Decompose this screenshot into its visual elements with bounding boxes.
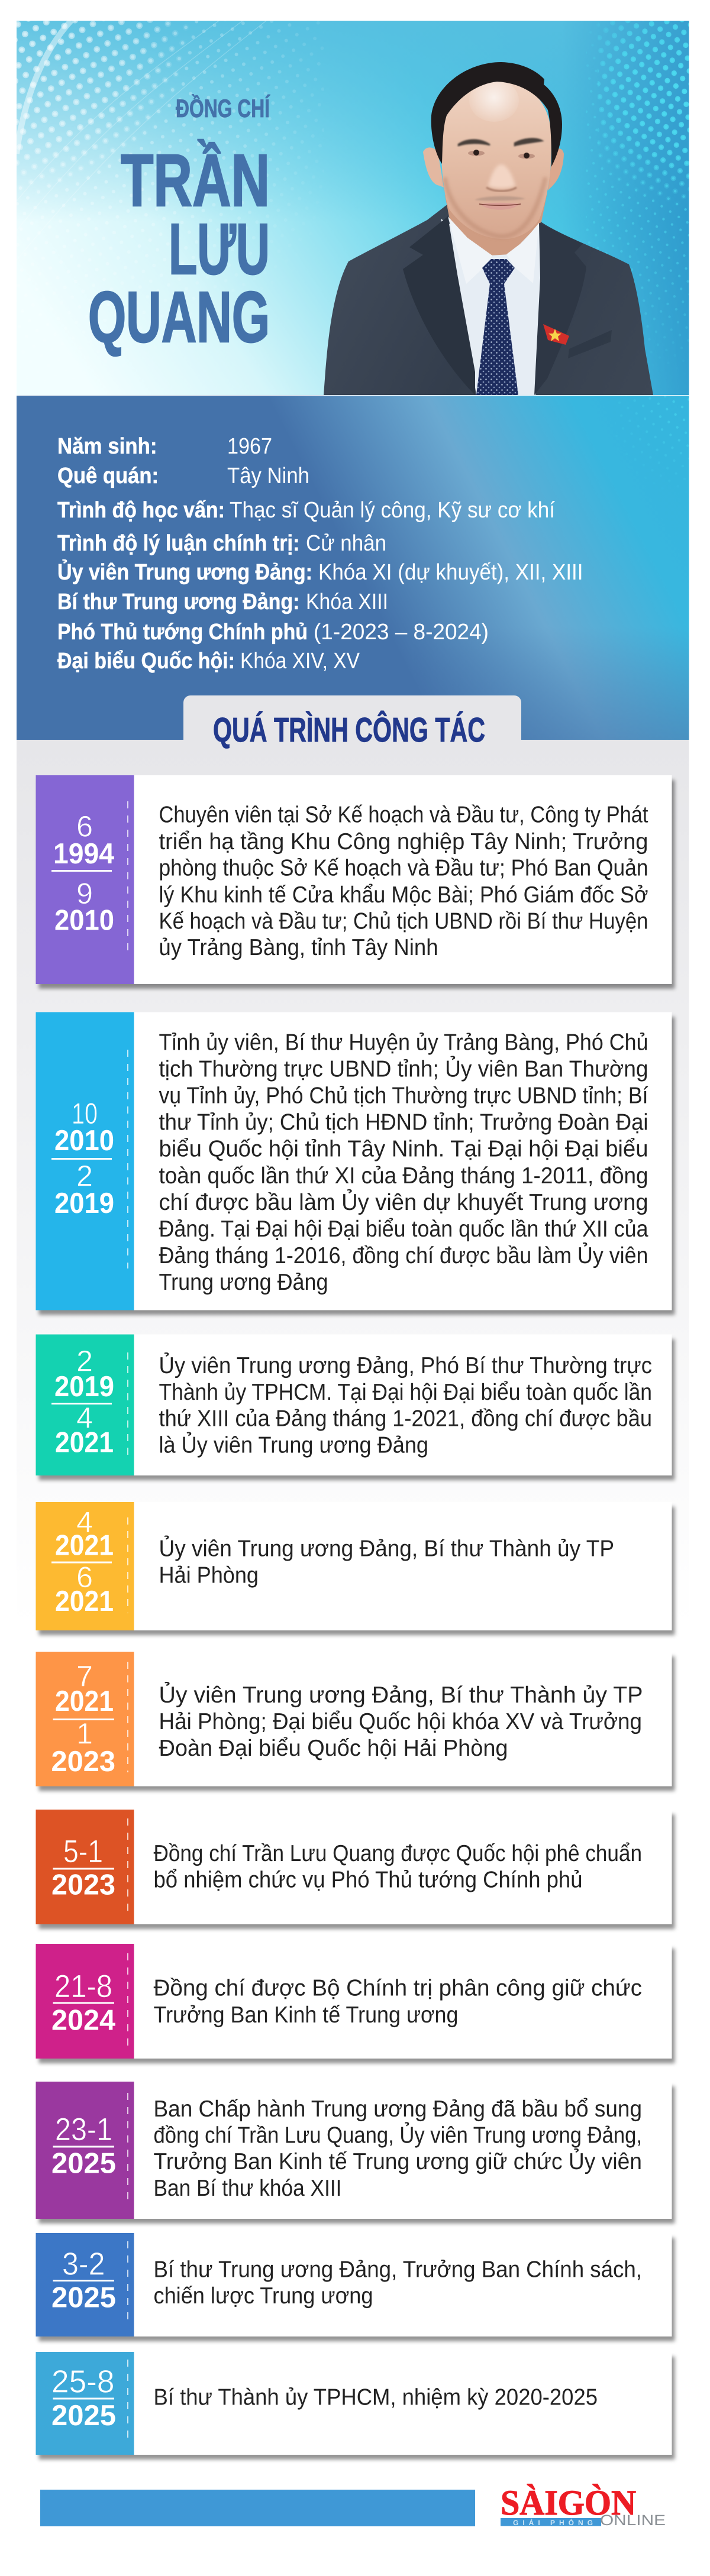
education: Trình độ học vấn: xyxy=(57,498,225,523)
description: là Ủy viên Trung ương Đảng xyxy=(159,1432,428,1458)
political theory level: Cử nhân xyxy=(306,531,386,556)
date badge: 2 xyxy=(76,1345,93,1378)
date badge: 2023 xyxy=(51,1746,115,1778)
description: Hải Phòng; Đại biểu Quốc hội khóa XV và Trưởng xyxy=(159,1709,642,1734)
description xyxy=(154,2096,642,2201)
name: Quang: QUANG xyxy=(88,277,270,357)
date badge xyxy=(36,2352,134,2455)
icon: national assembly flag pin xyxy=(543,324,569,345)
date badge: 2021 xyxy=(55,1685,114,1717)
date badge: 2023 xyxy=(51,1869,115,1901)
description: Chuyên viên tại Sở Kế hoạch và Đầu tư, Công ty Phát xyxy=(159,802,648,828)
date badge: 1 xyxy=(76,1717,93,1750)
description xyxy=(159,802,648,960)
description: đồng chí Trần Lưu Quang, Ủy viên Trung ương Đảng, xyxy=(154,2122,642,2148)
description: Đảng tháng 1-2016, đồng chí được bầu làm Ủy viên xyxy=(159,1242,648,1268)
label: Đồng chí: ĐỒNG CHÍ xyxy=(176,94,270,123)
deputy prime minister: Phó Thủ tướng Chính phủ xyxy=(57,620,308,645)
logo: Sài Gòn Giải Phóng Online: ONLINE xyxy=(600,2512,666,2529)
date badge: 25-8 xyxy=(51,2364,115,2400)
deputy prime minister xyxy=(57,620,489,645)
portrait: man in dark suit xyxy=(324,62,653,395)
description: Ủy viên Trung ương Đảng, Bí thư Thành ủy TP xyxy=(159,1682,643,1708)
date badge: 1994 xyxy=(53,838,114,870)
description: Thành ủy TPHCM. Tại Đại hội Đại biểu toàn quốc lần xyxy=(159,1380,652,1405)
date badge: 4 xyxy=(76,1506,93,1539)
date badge xyxy=(36,1652,134,1786)
description: lý Khu kinh tế Cửa khẩu Mộc Bài; Phó Giám đốc Sở xyxy=(159,882,648,908)
date badge xyxy=(36,1502,134,1630)
card: 2/2019 – 4/2021 xyxy=(36,1334,672,1475)
description: Trưởng Ban Kinh tế Trung ương xyxy=(154,2002,458,2028)
hometown: Tây Ninh xyxy=(227,464,309,488)
date badge: 2025 xyxy=(51,2400,116,2432)
central committee member xyxy=(57,559,583,585)
card: 10/2010 – 2/2019 xyxy=(36,1012,672,1310)
card: 3-2-2025 xyxy=(36,2233,672,2336)
description: bổ nhiệm chức vụ Phó Thủ tướng Chính phủ xyxy=(154,1868,582,1892)
date badge xyxy=(36,2082,134,2219)
description: chiến lược Trung ương xyxy=(154,2283,373,2309)
date badge: 2019 xyxy=(54,1187,114,1219)
date badge: 2019 xyxy=(54,1371,114,1403)
party secretary: Bí thư Trung ương Đảng: xyxy=(57,590,299,614)
logo: Sài Gòn Giải Phóng Online: SÀIGÒN xyxy=(501,2483,636,2522)
description xyxy=(154,1841,642,1892)
education: Thạc sĩ Quản lý công, Kỹ sư cơ khí xyxy=(230,498,555,523)
name: Trần: TRẦN xyxy=(121,140,270,222)
date badge: 6 xyxy=(76,810,93,843)
date badge: 2021 xyxy=(55,1426,114,1458)
card: 21-8-2024 xyxy=(36,1944,672,2059)
date badge: 4 xyxy=(76,1402,93,1435)
date badge xyxy=(36,2233,134,2336)
description: toàn quốc lần thứ XI của Đảng tháng 1-2011, đồng xyxy=(159,1163,648,1189)
central committee member: Khóa XI (dự khuyết), XII, XIII xyxy=(318,560,583,585)
card: 23-1-2025 xyxy=(36,2082,672,2219)
description xyxy=(159,1030,648,1295)
political theory level: Trình độ lý luận chính trị: xyxy=(57,531,299,556)
national assembly delegate xyxy=(57,649,360,674)
date badge: 3-2 xyxy=(62,2246,105,2281)
date badge: 5-1 xyxy=(63,1834,103,1869)
hero panel xyxy=(17,21,689,399)
date badge: 2 xyxy=(76,1159,93,1192)
description: ủy Trảng Bàng, tỉnh Tây Ninh xyxy=(159,935,438,960)
description: biểu Quốc hội tỉnh Tây Ninh. Tại Đại hội Đại biểu xyxy=(159,1137,648,1161)
name: Lưu: LƯU xyxy=(169,209,270,289)
description: Đảng. Tại Đại hội Đại biểu toàn quốc lần thứ XII của xyxy=(159,1216,648,1242)
description: chí được bầu làm Ủy viên dự khuyết Trung ương xyxy=(159,1189,648,1215)
halftone dots left xyxy=(17,21,324,247)
date badge: 21-8 xyxy=(54,1969,112,2004)
national assembly delegate: Đại biểu Quốc hội: xyxy=(57,649,235,674)
card: 5-1-2023 xyxy=(36,1810,672,1924)
description: Ban Chấp hành Trung ương Đảng đã bầu bổ sung xyxy=(154,2096,642,2122)
date badge: 9 xyxy=(76,877,93,910)
description: vụ Tỉnh ủy, Phó Chủ tịch Thường trực UBND tỉnh; Bí xyxy=(159,1083,648,1108)
description: tịch Thường trực UBND tỉnh; Ủy viên Ban Thường xyxy=(159,1056,648,1082)
description: Trưởng Ban Kinh tế Trung ương giữ chức Ủy viên xyxy=(154,2148,642,2174)
national assembly delegate: Khóa XIV, XV xyxy=(240,649,360,674)
hometown: Quê quán: xyxy=(57,464,159,488)
description: Kế hoạch và Đầu tư; Chủ tịch UBND rồi Bí thư Huyện xyxy=(159,908,648,934)
date badge: 2010 xyxy=(54,1125,114,1157)
date badge: 2021 xyxy=(55,1585,114,1617)
section heading tab xyxy=(183,695,521,749)
date badge: 23-1 xyxy=(55,2112,112,2147)
central committee member: Ủy viên Trung ương Đảng: xyxy=(57,559,312,585)
description: Ban Bí thư khóa XIII xyxy=(154,2176,342,2201)
deputy prime minister: (1-2023 – 8-2024) xyxy=(314,620,489,645)
description: Trung ương Đảng xyxy=(159,1270,328,1295)
description: Bí thư Trung ương Đảng, Trưởng Ban Chính sách, xyxy=(154,2257,642,2283)
card: 25-8-2025 xyxy=(36,2352,672,2455)
footer bar xyxy=(40,2490,475,2526)
description: Đoàn Đại biểu Quốc hội Hải Phòng xyxy=(159,1736,508,1761)
description: Tỉnh ủy viên, Bí thư Huyện ủy Trảng Bàng, Phó Chủ xyxy=(159,1030,648,1055)
description: triển hạ tầng Khu Công nghiệp Tây Ninh; Trưởng xyxy=(159,829,648,855)
career section background xyxy=(17,740,689,1627)
date badge: 2024 xyxy=(51,2005,115,2037)
description: Ủy viên Trung ương Đảng, Phó Bí thư Thường trực xyxy=(159,1352,652,1378)
birth year: 1967 xyxy=(227,434,272,459)
card: 6/1994 – 9/2010 xyxy=(36,775,672,984)
date badge xyxy=(36,1810,134,1924)
card: 7/2021 – 1/2023 xyxy=(36,1652,672,1786)
description xyxy=(159,1682,643,1761)
date badge: 10 xyxy=(72,1097,98,1130)
date badge: 2010 xyxy=(54,905,114,937)
description: phòng thuộc Sở Kế hoạch và Đầu tư; Phó Ban Quản xyxy=(159,855,648,881)
description: Hải Phòng xyxy=(159,1562,259,1588)
party secretary: Khóa XIII xyxy=(306,590,388,614)
date badge xyxy=(36,1334,134,1475)
logo: Sài Gòn Giải Phóng Online: GIẢI PHÓNG xyxy=(513,2519,593,2527)
date badge: 7 xyxy=(76,1659,93,1692)
description xyxy=(159,1535,614,1588)
halftone dots right xyxy=(586,21,689,376)
birth year xyxy=(57,434,272,459)
education xyxy=(57,498,555,523)
description: thư Tỉnh ủy; Chủ tịch HĐND tỉnh; Trưởng Đoàn Đại xyxy=(159,1109,648,1135)
description: Đồng chí được Bộ Chính trị phân công giữ chức xyxy=(154,1975,642,2001)
date badge: 6 xyxy=(76,1561,93,1594)
date badge: 2025 xyxy=(51,2281,116,2313)
date badge xyxy=(36,1944,134,2059)
date badge: 2025 xyxy=(51,2148,116,2180)
birth year: Năm sinh: xyxy=(57,434,157,459)
description xyxy=(159,1352,652,1458)
date badge xyxy=(36,1012,134,1310)
date badge: 2021 xyxy=(55,1529,114,1561)
description: Đồng chí Trần Lưu Quang được Quốc hội phê chuẩn xyxy=(154,1841,642,1866)
description xyxy=(154,2257,642,2309)
description: Ủy viên Trung ương Đảng, Bí thư Thành ủy TP xyxy=(159,1535,614,1561)
hometown xyxy=(57,464,309,488)
description xyxy=(154,1975,642,2028)
info panel xyxy=(17,396,689,740)
description: Bí thư Thành ủy TPHCM, nhiệm kỳ 2020-2025 xyxy=(154,2384,598,2410)
section heading tab: QUÁ TRÌNH CÔNG TÁC xyxy=(213,711,485,749)
date badge xyxy=(36,775,134,984)
description: thứ XIII của Đảng tháng 1-2021, đồng chí được bầu xyxy=(159,1406,652,1431)
card: 4/2021 – 6/2021 xyxy=(36,1502,672,1630)
